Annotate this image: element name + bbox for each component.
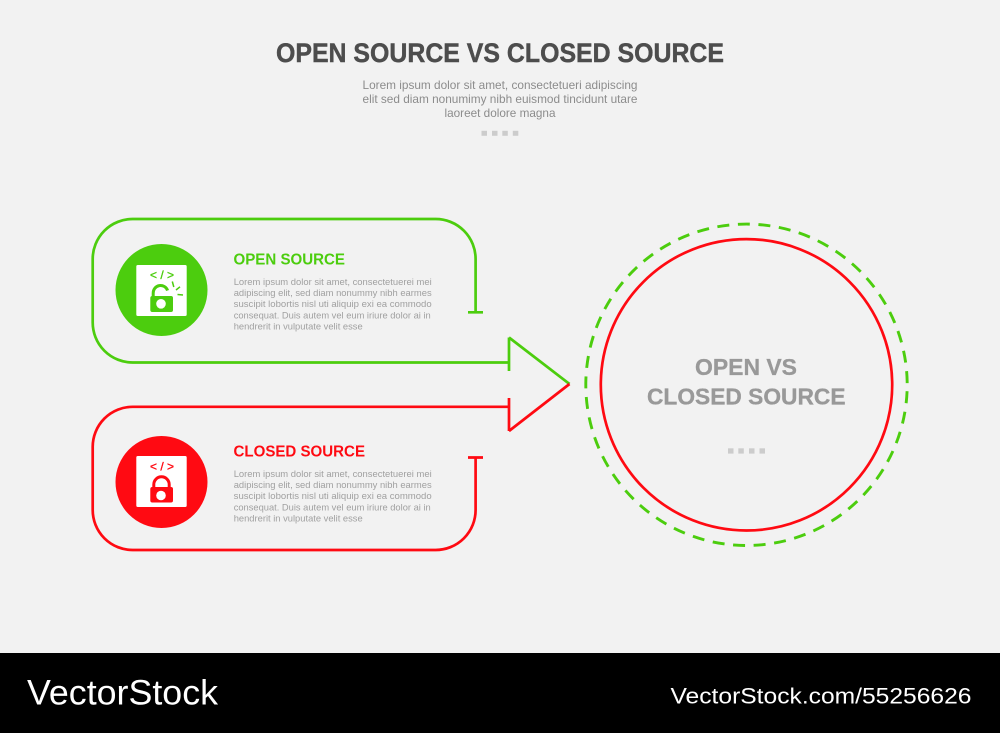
text block: open source description: consequat. Duis autem vel eum iriure dolor ai in — [234, 310, 431, 321]
circle heading — [647, 354, 846, 410]
text block: closed source description — [234, 469, 432, 525]
footer band — [0, 653, 1000, 733]
circle dots — [728, 448, 765, 454]
icon: open padlock with code: </> — [150, 268, 174, 282]
text block: closed source description: consequat. Duis autem vel eum iriure dolor ai in — [234, 502, 431, 513]
heading: closed source: CLOSED SOURCE — [234, 444, 365, 460]
panel: central comparison circle — [586, 224, 907, 546]
subtitle text block: elit sed diam nonumimy nibh euismod tincidunt utare — [362, 92, 638, 106]
circle heading: OPEN VS — [695, 354, 797, 380]
icon: open padlock with code — [116, 244, 208, 336]
subtitle text block — [362, 78, 638, 120]
text block: open source description — [234, 277, 432, 333]
text block: closed source description: suscipit lobortis nisl uti aliquip exi ea commodo — [234, 491, 432, 502]
panel: open source — [93, 219, 569, 384]
icon: closed padlock with code — [116, 436, 208, 528]
title: OPEN SOURCE VS CLOSED SOURCE — [276, 38, 724, 68]
text block: open source description: Lorem ipsum dolor sit amet, consectetuerei mei — [234, 277, 432, 288]
circle heading: CLOSED SOURCE — [647, 384, 846, 410]
text block: open source description: suscipit lobortis nisl uti aliquip exi ea commodo — [234, 299, 432, 310]
solid red ring — [601, 239, 892, 531]
footer logo text: VectorStock — [27, 674, 219, 712]
subtitle text block: laoreet dolore magna — [444, 106, 556, 120]
green outline arrow path — [93, 219, 569, 384]
icon: closed padlock with code: </> — [150, 460, 174, 474]
dashed green ring — [586, 224, 907, 546]
text block: open source description: hendrerit in vulputate velit esse — [234, 322, 363, 333]
text block: closed source description: Lorem ipsum dolor sit amet, consectetuerei mei — [234, 469, 432, 480]
subtitle text block: Lorem ipsum dolor sit amet, consectetueri adipiscing — [362, 78, 638, 92]
header dots — [482, 131, 518, 136]
red outline arrow path — [93, 384, 569, 550]
panel: closed source — [93, 384, 569, 550]
text block: open source description: adipiscing elit, sed diam nonummy nibh earmes — [234, 288, 432, 299]
heading: open source: OPEN SOURCE — [234, 252, 345, 268]
text block: closed source description: hendrerit in vulputate velit esse — [234, 514, 363, 525]
footer url text: VectorStock.com/55256626 — [670, 683, 972, 708]
text block: closed source description: adipiscing elit, sed diam nonummy nibh earmes — [234, 480, 432, 491]
